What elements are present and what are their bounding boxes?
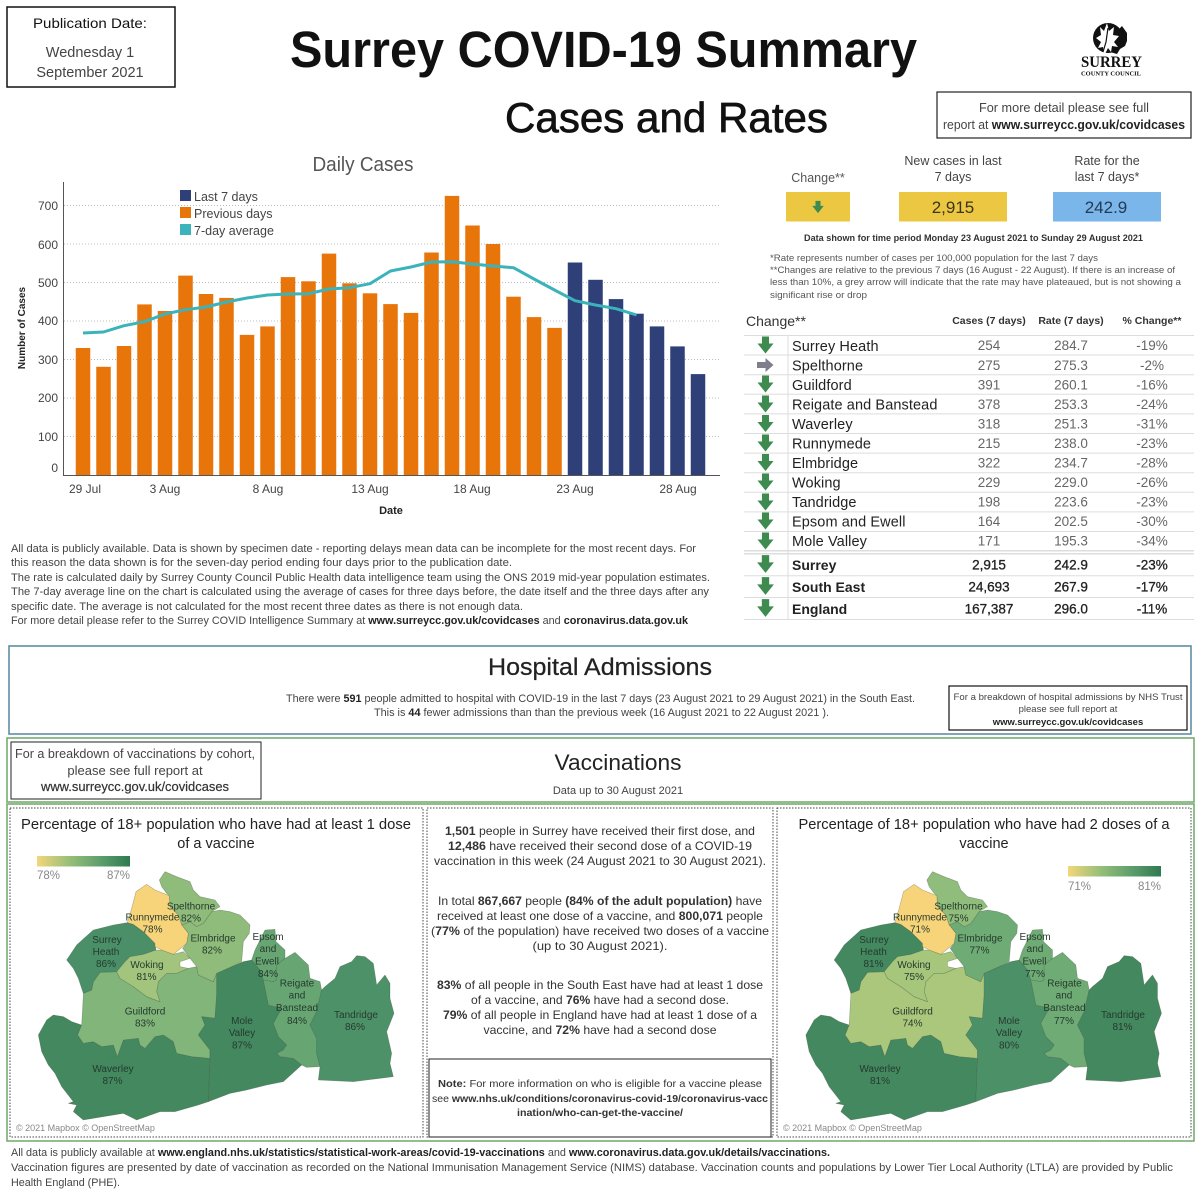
logo: Surrey County Council: SURREY (1081, 54, 1142, 71)
row: Reigate and Banstead: Reigate and Banstead (792, 398, 938, 414)
heading: Vaccinations: Vaccinations (554, 750, 682, 775)
row: Runnymede: -23% (1136, 436, 1168, 451)
map attribution: © 2021 Mapbox © OpenStreetMap (16, 1123, 155, 1133)
panel: vaccination statistics (427, 808, 773, 1137)
row: Woking: -26% (1136, 475, 1168, 490)
y axis labels: 600 (38, 238, 58, 252)
data notes text: this reason the data shown is for the seven-day period ending four days prior to the publication date. (11, 557, 512, 569)
map labels: first dose: Ewell (255, 956, 279, 968)
chart legend: 7-day average (194, 224, 274, 238)
map labels: second dose: Elmbridge (957, 934, 1003, 944)
map labels: second dose (859, 902, 1145, 1087)
x axis labels: 23 Aug (556, 482, 594, 496)
panel: first dose map (10, 808, 423, 1137)
cohort breakdown box: please see full report at (67, 763, 203, 778)
row: Runnymede: 238.0 (1054, 436, 1088, 451)
cohort breakdown box (11, 742, 261, 799)
y axis labels: 300 (38, 353, 58, 367)
map labels: first dose: 87% (232, 1040, 252, 1052)
map labels: second dose: Spelthorne (934, 902, 983, 912)
y axis labels: 700 (38, 199, 58, 213)
map labels: second dose: 81% (870, 1076, 890, 1087)
map labels: first dose (92, 902, 378, 1087)
bar chart: daily cases (17, 182, 720, 517)
map legend: 71% (1068, 881, 1091, 893)
map labels: first dose: and (260, 944, 276, 955)
map title (21, 817, 411, 852)
map legend (37, 856, 130, 882)
text: totals: (77% of the population) have received two doses of a vaccine (431, 924, 769, 938)
data notes text: specific date. The average is not calculated for the most recent three dates as there is not enough data. (11, 601, 523, 613)
map title (798, 817, 1170, 852)
row: Mole Valley: 195.3 (1054, 534, 1088, 548)
y axis labels: 0 (51, 461, 58, 475)
KPI: new cases: 2,915 (932, 198, 974, 217)
row: Tandridge: -23% (1136, 494, 1168, 510)
rate footnotes (770, 253, 1182, 301)
hospital admissions text: There were 591 people admitted to hospital with COVID-19 in the last 7 days (23 August 2021 to 29 August 2021) in the South East. (286, 693, 915, 705)
NHS Trust breakdown box: please see full report at (1019, 704, 1118, 715)
text: totals: In total 867,667 people (84% of the adult population) have (438, 894, 762, 908)
y axis title: Number of Cases (17, 286, 28, 369)
row: England: England (792, 601, 847, 617)
row: Elmbridge: 322 (978, 456, 1000, 470)
choropleth map: second dose (806, 872, 1161, 1120)
map labels: second dose: Heath (860, 947, 887, 958)
row: England (757, 599, 1167, 617)
data notes text: The 7-day average line on the chart is calculated using the average of cases for three days before, the date itself and the three days after any (11, 586, 710, 598)
map labels: first dose: 78% (142, 924, 163, 936)
line: 7-day average (83, 262, 636, 333)
bars: previous days (76, 196, 562, 475)
data notes text: All data is publicly available. Data is shown by specimen date - reporting delays mean data can be incomplete for the most recent days. For (11, 543, 696, 555)
map labels: second dose: Epsom (1019, 932, 1051, 943)
bars: last 7 days (568, 262, 705, 475)
map labels: second dose: 77% (969, 946, 990, 956)
title: Surrey COVID-19 Summary (290, 21, 918, 78)
map legend: 78% (37, 870, 60, 882)
map labels: second dose: Runnymede (893, 912, 947, 924)
row: Spelthorne: -2% (1140, 358, 1164, 373)
row: Woking (758, 474, 1168, 492)
vaccination data date: Data up to 30 August 2021 (553, 785, 683, 797)
row: Waverley: Waverley (792, 417, 853, 433)
logo: Surrey County Council: COUNTY COUNCIL (1081, 70, 1142, 78)
KPI: new cases: 7 days (935, 170, 971, 184)
map labels: first dose: Elmbridge (190, 934, 236, 944)
row: Surrey Heath: Surrey Heath (792, 339, 879, 355)
map labels: first dose: Banstead (276, 1003, 318, 1014)
row: Surrey Heath: 254 (978, 338, 1001, 353)
text: South East and England: 79% of all people in England have had at least 1 dose of a (443, 1008, 757, 1022)
row: Surrey total: 2,915 (972, 558, 1006, 572)
row: Runnymede: 215 (978, 436, 1000, 451)
KPI: new cases: New cases in last (904, 154, 1002, 168)
map labels: first dose: Tandridge (334, 1010, 378, 1021)
map labels: first dose: Heath (93, 947, 119, 958)
text: first and second doses this week: vaccination in this week (24 August 2021 to 30 August 2021). (434, 854, 766, 868)
map labels: second dose: Valley (996, 1028, 1022, 1039)
map labels: second dose: and (1056, 990, 1072, 1002)
row: Epsom and Ewell (758, 512, 1168, 530)
table header (746, 313, 1182, 329)
rate footnotes: significant rise or drop (770, 290, 867, 301)
row: South East: 267.9 (1054, 580, 1088, 594)
table header: % Change** (1123, 315, 1182, 327)
y axis labels: 200 (38, 391, 58, 405)
map legend: 81% (1138, 881, 1161, 893)
text: South East and England (437, 978, 763, 1037)
rate footnotes: less than 10%, a grey arrow will indicate that the rate may have plateaued, but is not showing a (770, 277, 1182, 288)
text: totals: (up to 30 August 2021). (532, 939, 668, 953)
map labels: first dose: Reigate (280, 978, 315, 990)
data notes text (11, 543, 710, 627)
map labels: first dose: 84% (287, 1016, 307, 1027)
map title: Percentage of 18+ population who have had at least 1 dose (21, 817, 411, 833)
NHS Trust breakdown box: www.surreycc.gov.uk/covidcases (992, 717, 1143, 728)
choropleth map: first dose (38, 872, 394, 1120)
footer notes: All data is publicly available at www.england.nhs.uk/statistics/statistical-work-areas/covid-19-vaccinations and www.coronavirus.data.gov.uk/details/vaccinations. (11, 1147, 830, 1159)
row: Tandridge: 198 (978, 494, 1000, 510)
row: Woking: 229 (978, 475, 1000, 490)
chart legend: Last 7 days (194, 190, 258, 204)
heading: Hospital Admissions: Hospital Admissions (488, 654, 712, 681)
panel: vaccination details outer frame (7, 804, 1194, 1141)
row: Spelthorne: 275.3 (1054, 358, 1088, 373)
row: Surrey total: 242.9 (1054, 558, 1088, 572)
map labels: second dose: 75% (904, 972, 924, 983)
hospital admissions text: This is 44 fewer admissions than than the previous week (16 August 2021 to 22 August 2021 ). (374, 707, 829, 719)
map labels: second dose: Guildford (892, 1006, 933, 1018)
map labels: first dose: 87% (102, 1076, 123, 1087)
x axis labels (69, 482, 697, 496)
eligibility note box: ination/who-can-get-the-vaccine/ (517, 1107, 683, 1119)
subtitle: Cases and Rates (505, 94, 828, 141)
text: South East and England: vaccine, and 72% have had a second dose (484, 1023, 717, 1037)
panel: hospital admissions (9, 646, 1191, 734)
KPI: change: Change** (791, 171, 845, 185)
text: first and second doses this week: 12,486 have received their second dose of a COVID-19 (448, 839, 752, 853)
cohort breakdown box: For a breakdown of vaccinations by cohort, (15, 746, 255, 761)
map title: Percentage of 18+ population who have had 2 doses of a (798, 817, 1170, 833)
row: Woking: Woking (792, 476, 841, 492)
row: Waverley: 251.3 (1054, 416, 1088, 432)
row: Runnymede: Runnymede (792, 436, 871, 452)
KPI: rate: Rate for the (1074, 154, 1140, 168)
row: England: 296.0 (1054, 602, 1088, 616)
row: Guildford: Guildford (792, 378, 852, 394)
x axis labels: 13 Aug (351, 482, 389, 496)
map labels: first dose: Guildford (125, 1006, 165, 1018)
row: Surrey Heath: -19% (1136, 338, 1168, 353)
map labels: second dose: Surrey (859, 935, 889, 946)
map labels: second dose: 75% (948, 914, 969, 924)
further detail box (937, 92, 1191, 138)
data notes text: For more detail please refer to the Surrey COVID Intelligence Summary at www.surreycc.gov.uk/covidcases and coronavirus.data.gov.uk (11, 615, 688, 627)
time period text: Data shown for time period Monday 23 August 2021 to Sunday 29 August 2021 (804, 233, 1144, 244)
footer notes: Vaccination figures are presented by date of vaccination as recorded on the National Immunisation Management Service (NIMS) database. Vaccination counts and populations by Lower Tier Local Authority (LTLA) are provided by Public (11, 1162, 1174, 1174)
row: Surrey Heath (758, 336, 1168, 355)
row: Waverley: -31% (1136, 416, 1168, 432)
text: totals (431, 894, 769, 953)
x axis labels: 8 Aug (253, 482, 283, 496)
table header: Change** (746, 313, 806, 329)
text: totals: received at least one dose of a vaccine, and 800,071 people (437, 909, 763, 923)
hospital admissions text (286, 693, 915, 719)
x axis labels: 18 Aug (453, 482, 491, 496)
row: Spelthorne: Spelthorne (792, 358, 863, 374)
map labels: second dose: Banstead (1043, 1003, 1086, 1014)
cohort breakdown box: www.surreycc.gov.uk/covidcases (40, 779, 229, 794)
x axis title: Date (379, 505, 403, 517)
row: England: 167,387 (965, 602, 1013, 616)
row: Surrey total (757, 555, 1168, 573)
x axis labels: 28 Aug (659, 482, 697, 496)
map labels: first dose: 86% (345, 1022, 365, 1033)
map labels: second dose: 71% (910, 924, 930, 936)
row: Guildford: 260.1 (1054, 378, 1088, 392)
row: Elmbridge (758, 454, 1168, 472)
row: Mole Valley: -34% (1136, 534, 1168, 548)
row: Guildford: -16% (1136, 378, 1168, 392)
row: Elmbridge: Elmbridge (792, 456, 858, 472)
data notes text: The rate is calculated daily by Surrey County Council Public Health data intelligence team using the ONS 2019 mid-year population estimates. (11, 572, 710, 584)
chart legend: Previous days (194, 207, 273, 221)
row: Epsom and Ewell: Epsom and Ewell (792, 514, 906, 530)
map labels: first dose: Mole (231, 1016, 253, 1027)
map labels: first dose: Epsom (252, 932, 284, 943)
map legend (1068, 866, 1161, 893)
map labels: first dose: and (289, 990, 305, 1002)
map labels: first dose: Waverley (92, 1064, 134, 1075)
map labels: first dose: 84% (258, 969, 278, 980)
map labels: first dose: 82% (181, 914, 201, 924)
rate footnotes: *Rate represents number of cases per 100,000 population for the last 7 days (770, 253, 1098, 264)
map labels: first dose: Spelthorne (167, 902, 216, 912)
map labels: first dose: 81% (136, 972, 157, 983)
row: South East (757, 577, 1168, 595)
row: Reigate and Banstead: 378 (978, 397, 1000, 412)
x axis labels: 3 Aug (150, 482, 180, 496)
row: Epsom and Ewell: -30% (1136, 514, 1168, 529)
table header: Cases (7 days) (952, 315, 1026, 327)
y axis labels: 400 (38, 314, 58, 328)
row: Spelthorne: 275 (978, 358, 1000, 373)
map labels: second dose: 81% (863, 959, 884, 970)
row: Reigate and Banstead: -24% (1136, 397, 1168, 412)
map labels: second dose: 77% (1054, 1016, 1074, 1027)
text: South East and England: of a vaccine, and 76% have had a second dose. (471, 993, 729, 1007)
row: Tandridge: Tandridge (792, 495, 857, 511)
publication date box (7, 7, 175, 87)
row: Surrey total: Surrey (792, 557, 837, 573)
map legend: 87% (107, 870, 130, 882)
table: district cases (744, 313, 1194, 620)
row: South East: 24,693 (968, 580, 1010, 594)
KPI: rate: last 7 days* (1075, 170, 1139, 184)
map labels: first dose: Valley (229, 1028, 255, 1039)
map labels: second dose: Reigate (1047, 978, 1082, 990)
publication date box: Publication Date: (33, 15, 147, 31)
rate footnotes: **Changes are relative to the previous 7 days (16 August - 22 August). If there is an increase of (770, 265, 1175, 276)
chart legend (180, 190, 274, 238)
map attribution: © 2021 Mapbox © OpenStreetMap (783, 1123, 922, 1133)
row: Mole Valley (758, 532, 1168, 550)
row: Spelthorne (757, 358, 1164, 374)
row: Reigate and Banstead (758, 396, 1168, 414)
eligibility note box (429, 1059, 771, 1137)
map labels: second dose: Woking (897, 960, 931, 971)
map labels: first dose: 86% (96, 959, 116, 970)
row: Elmbridge: -28% (1136, 456, 1168, 470)
axes (64, 182, 720, 476)
row: England: -11% (1137, 602, 1167, 616)
row: Elmbridge: 234.7 (1054, 456, 1088, 470)
KPI: rate (1053, 154, 1161, 222)
map labels: first dose: Surrey (92, 935, 122, 946)
KPI: change (786, 171, 850, 222)
further detail box: report at www.surreycc.gov.uk/covidcases (943, 118, 1185, 132)
footer notes: Health England (PHE). (11, 1177, 120, 1189)
map labels: second dose: and (1027, 944, 1043, 955)
row: Tandridge: 223.6 (1054, 494, 1088, 510)
text: first and second doses this week (434, 824, 766, 868)
row: Waverley: 318 (978, 416, 1000, 432)
map labels: second dose: 77% (1025, 969, 1045, 980)
publication date box: September 2021 (36, 65, 144, 81)
text: South East and England: 83% of all people in the South East have had at least 1 dose (437, 978, 763, 992)
row: Mole Valley: Mole Valley (792, 534, 868, 550)
map labels: first dose: Runnymede (126, 912, 180, 924)
KPI: new cases (899, 154, 1007, 222)
row: Guildford (758, 376, 1168, 394)
map labels: first dose: 83% (135, 1018, 155, 1030)
row: Tandridge (758, 494, 1168, 511)
row: Woking: 229.0 (1054, 475, 1088, 490)
eligibility note box: see www.nhs.uk/conditions/coronavirus-covid-19/coronavirus-vacc (432, 1093, 768, 1105)
row: Mole Valley: 171 (978, 534, 1000, 548)
row: South East: South East (792, 579, 865, 595)
row: Guildford: 391 (978, 378, 1000, 392)
y axis labels (38, 199, 58, 475)
row: Epsom and Ewell: 202.5 (1054, 514, 1088, 529)
further detail box: For more detail please see full (979, 101, 1149, 115)
y axis labels: 100 (38, 430, 58, 444)
row: Reigate and Banstead: 253.3 (1054, 397, 1088, 412)
text: first and second doses this week: 1,501 people in Surrey have received their first dose, and (445, 824, 755, 838)
footer notes (11, 1147, 1174, 1189)
map labels: second dose: 74% (902, 1018, 923, 1030)
panel: second dose map (777, 808, 1191, 1137)
row: Runnymede (758, 434, 1168, 452)
publication date box: Wednesday 1 (46, 45, 134, 61)
row: Epsom and Ewell: 164 (978, 514, 1001, 529)
map labels: second dose: Ewell (1023, 956, 1046, 968)
map labels: second dose: Mole (998, 1016, 1020, 1027)
logo: Surrey County Council (1081, 23, 1142, 78)
map title: of a vaccine (177, 836, 255, 852)
panel: vaccinations header (7, 738, 1194, 802)
y axis labels: 500 (38, 276, 58, 290)
NHS Trust breakdown box: For a breakdown of hospital admissions by NHS Trust (954, 692, 1183, 703)
row: Surrey total: -23% (1136, 558, 1168, 572)
heading: Daily Cases: Daily Cases (312, 154, 414, 176)
map labels: second dose: Waverley (859, 1064, 901, 1075)
map labels: first dose: 82% (202, 946, 222, 956)
x axis labels: 29 Jul (69, 482, 101, 496)
map labels: second dose: 81% (1112, 1022, 1133, 1033)
row: South East: -17% (1136, 580, 1168, 594)
map labels: second dose: Tandridge (1101, 1010, 1145, 1021)
NHS Trust breakdown box (949, 686, 1187, 730)
KPI: rate: 242.9 (1085, 198, 1127, 217)
row: Waverley (758, 415, 1168, 433)
row: Surrey Heath: 284.7 (1054, 338, 1088, 353)
map labels: first dose: Woking (130, 960, 164, 971)
eligibility note box: Note: For more information on who is eligible for a vaccine please (438, 1078, 762, 1090)
table header: Rate (7 days) (1038, 315, 1104, 327)
map title: vaccine (959, 836, 1009, 852)
map labels: second dose: 80% (999, 1040, 1019, 1052)
